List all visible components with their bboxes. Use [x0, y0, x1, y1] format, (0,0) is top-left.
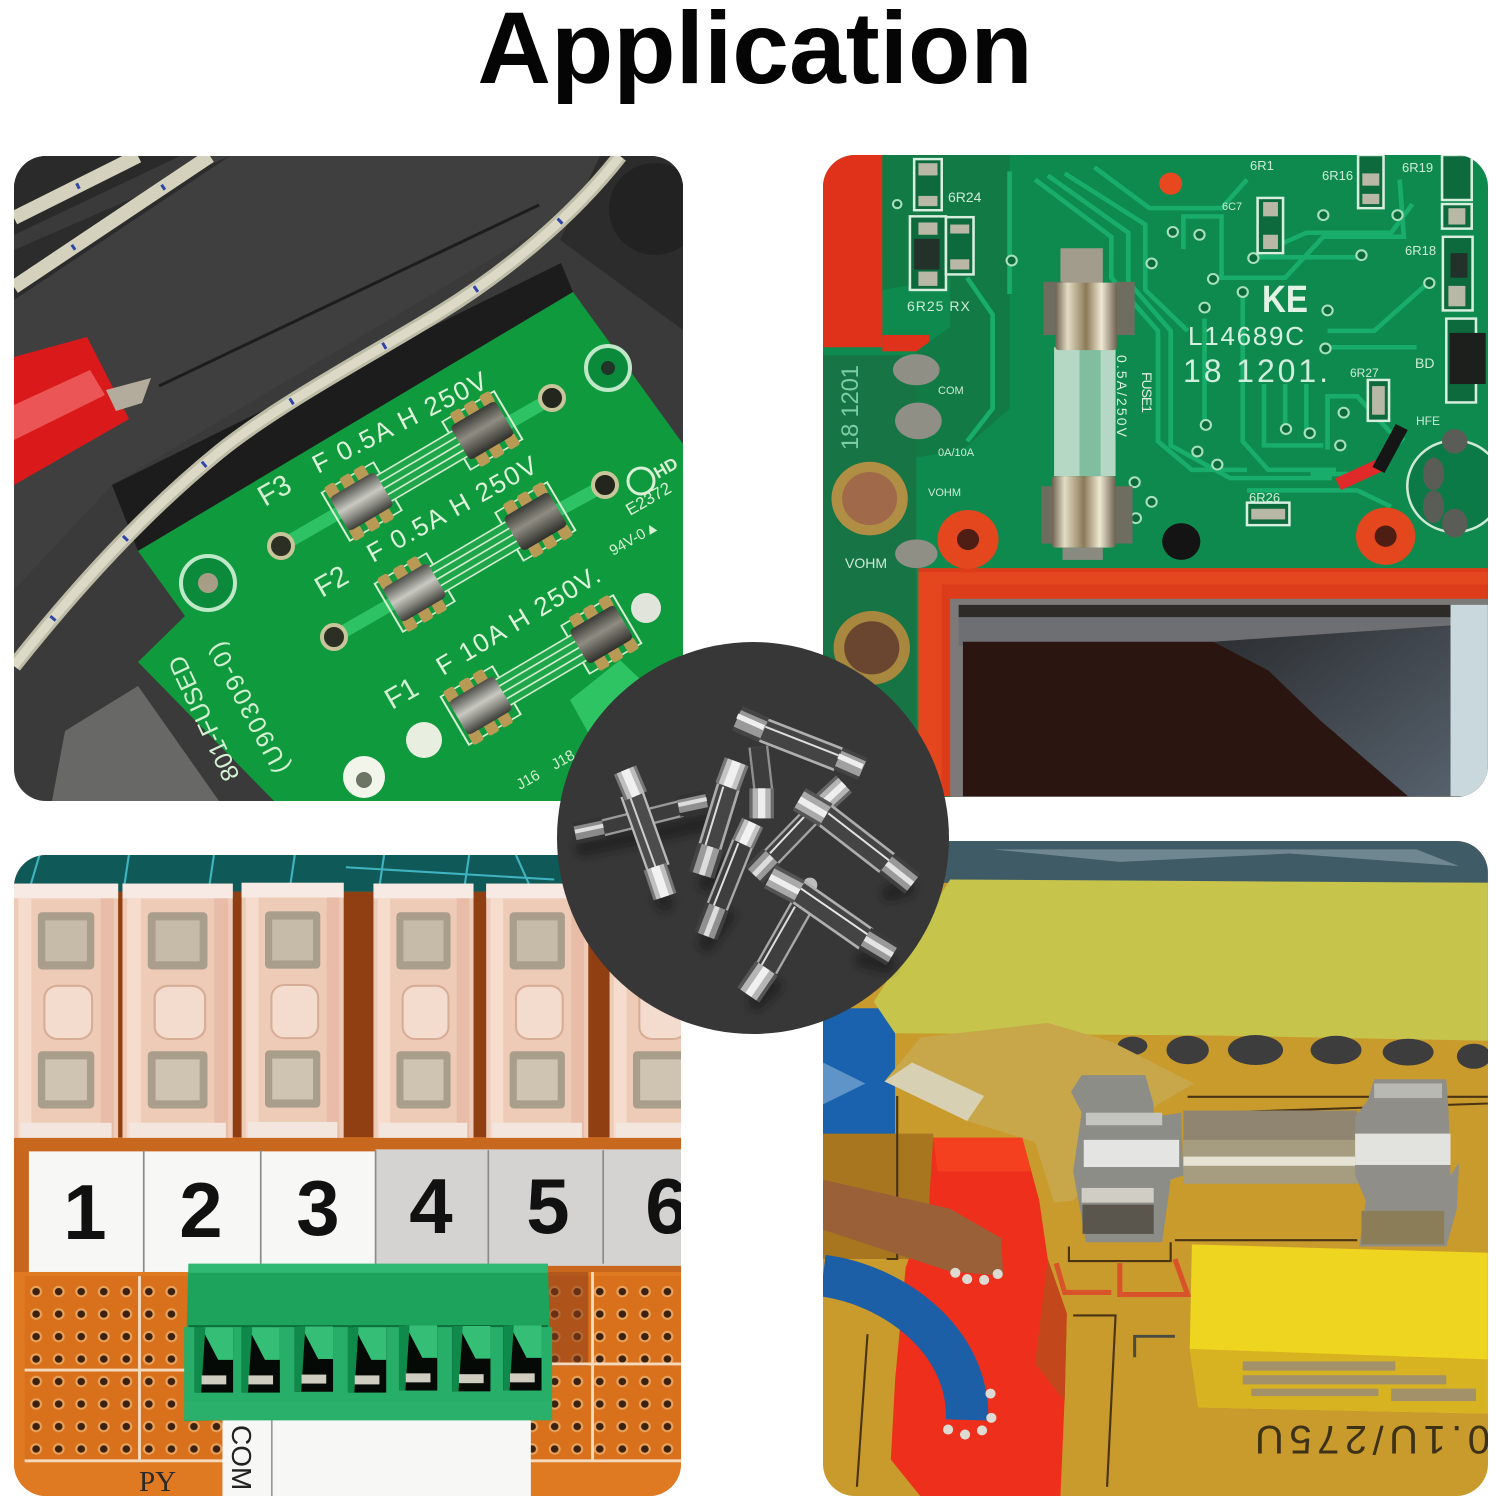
board silkscreen text: J16 [514, 767, 543, 793]
board labels: HFE [1416, 414, 1440, 428]
fuse horizontal [575, 799, 707, 833]
fuses on board [320, 388, 643, 748]
board silkscreen text: F 0.5A H 250V [307, 365, 492, 479]
circuit traces [967, 167, 1455, 523]
panel: transformer, fuse clips and capacitor (bottom right) [823, 841, 1491, 1496]
fuse cross vertical [625, 770, 665, 897]
fuse diagonal behind [754, 784, 844, 875]
braided wires [14, 156, 620, 666]
perforated board [14, 1272, 681, 1496]
insulating sheet [884, 1023, 1194, 1203]
board labels: 0A/10A [938, 447, 975, 459]
board traces [857, 1096, 1488, 1487]
fuse in holder [1041, 248, 1135, 560]
fuse lower left [748, 907, 802, 995]
fuse centre upper [702, 762, 737, 875]
capacitor value text: 0.1U/275U [1255, 1417, 1490, 1461]
board labels: 6R1 [1250, 158, 1274, 173]
board silkscreen text: F1 [380, 672, 424, 716]
board labels: 6R19 [1402, 160, 1433, 175]
board labels: L14689C [1188, 321, 1304, 351]
solder row [1118, 1035, 1491, 1069]
slot numbers 1 to 6: 4 [409, 1162, 453, 1250]
shadows [583, 822, 907, 1002]
white label strip [222, 1417, 531, 1499]
board silkscreen text: E2372 [622, 478, 675, 519]
board labels [837, 158, 1440, 571]
board labels: 6R26 [1249, 490, 1280, 505]
slot numbers 1 to 6 [68, 1178, 681, 1239]
number label strip [29, 1149, 681, 1272]
panel: PCB with three fuses (top left) [14, 156, 701, 801]
COM label: COM [226, 1425, 257, 1490]
board labels: VOHM [845, 555, 887, 571]
board silkscreen text [163, 365, 681, 793]
board labels: 0.5A/250V [1114, 355, 1130, 438]
board labels: 6R18 [1405, 243, 1436, 258]
LCD screen [950, 599, 1488, 799]
fuse in metal clips [1071, 1075, 1459, 1246]
fuse right long [799, 799, 913, 884]
board labels: FUSE1 [1139, 372, 1155, 413]
board labels: BD [1415, 355, 1434, 371]
yellow transformer block [874, 879, 1488, 1041]
fuse small behind [758, 747, 763, 818]
board labels: 6R27 [1350, 366, 1379, 380]
slot numbers 1 to 6: 1 [63, 1168, 107, 1256]
board labels: 18 1201. [1183, 353, 1328, 389]
board labels: 6R16 [1322, 168, 1353, 183]
board labels: 18 1201 [837, 365, 864, 450]
board silkscreen text: F 0.5A H 250V [361, 450, 543, 568]
surface-mount components [910, 155, 1476, 525]
fuse holders [14, 883, 712, 1141]
slot numbers 1 to 6: 3 [296, 1164, 340, 1252]
slot numbers 1 to 6: 5 [526, 1162, 570, 1250]
board silkscreen text: 94V-0▲ [606, 518, 662, 559]
centre circle: assorted glass fuses [557, 642, 949, 1034]
board labels: 6C7 [1222, 201, 1242, 213]
green terminal block [184, 1264, 552, 1421]
slot numbers 1 to 6: 2 [179, 1166, 223, 1254]
fuse lower long [770, 877, 893, 955]
panel: fuse holders and terminal block (bottom left) [14, 855, 712, 1499]
fuse centre lower [706, 823, 753, 936]
board labels: KE [1262, 279, 1308, 321]
sockets [831, 462, 910, 685]
board silkscreen text: HD [650, 454, 681, 482]
panel: multimeter circuit board (top right) [823, 155, 1500, 799]
board silkscreen text: (U90309-0) [203, 637, 295, 778]
board silkscreen text: F2 [310, 560, 354, 604]
board labels: 6R24 [948, 189, 982, 205]
slot numbers 1 to 6: 6 [645, 1162, 689, 1250]
board silkscreen text: 801-FUSED [163, 651, 245, 785]
board silkscreen text: F 10A H 250V. [431, 560, 606, 681]
board labels: 6R25 RX [907, 298, 971, 314]
red probe [14, 337, 151, 485]
board silkscreen text: J18 [548, 747, 578, 773]
board silkscreen text: F3 [252, 469, 297, 513]
board labels: COM [938, 385, 964, 397]
fuse long top [737, 716, 863, 769]
red connector with wires [823, 1138, 1067, 1496]
green circuit board [138, 292, 683, 801]
yellow capacitor [1190, 1244, 1488, 1414]
red LCD frame [918, 568, 1488, 796]
PY label: PY [139, 1466, 176, 1498]
board labels: VOHM [928, 487, 961, 499]
